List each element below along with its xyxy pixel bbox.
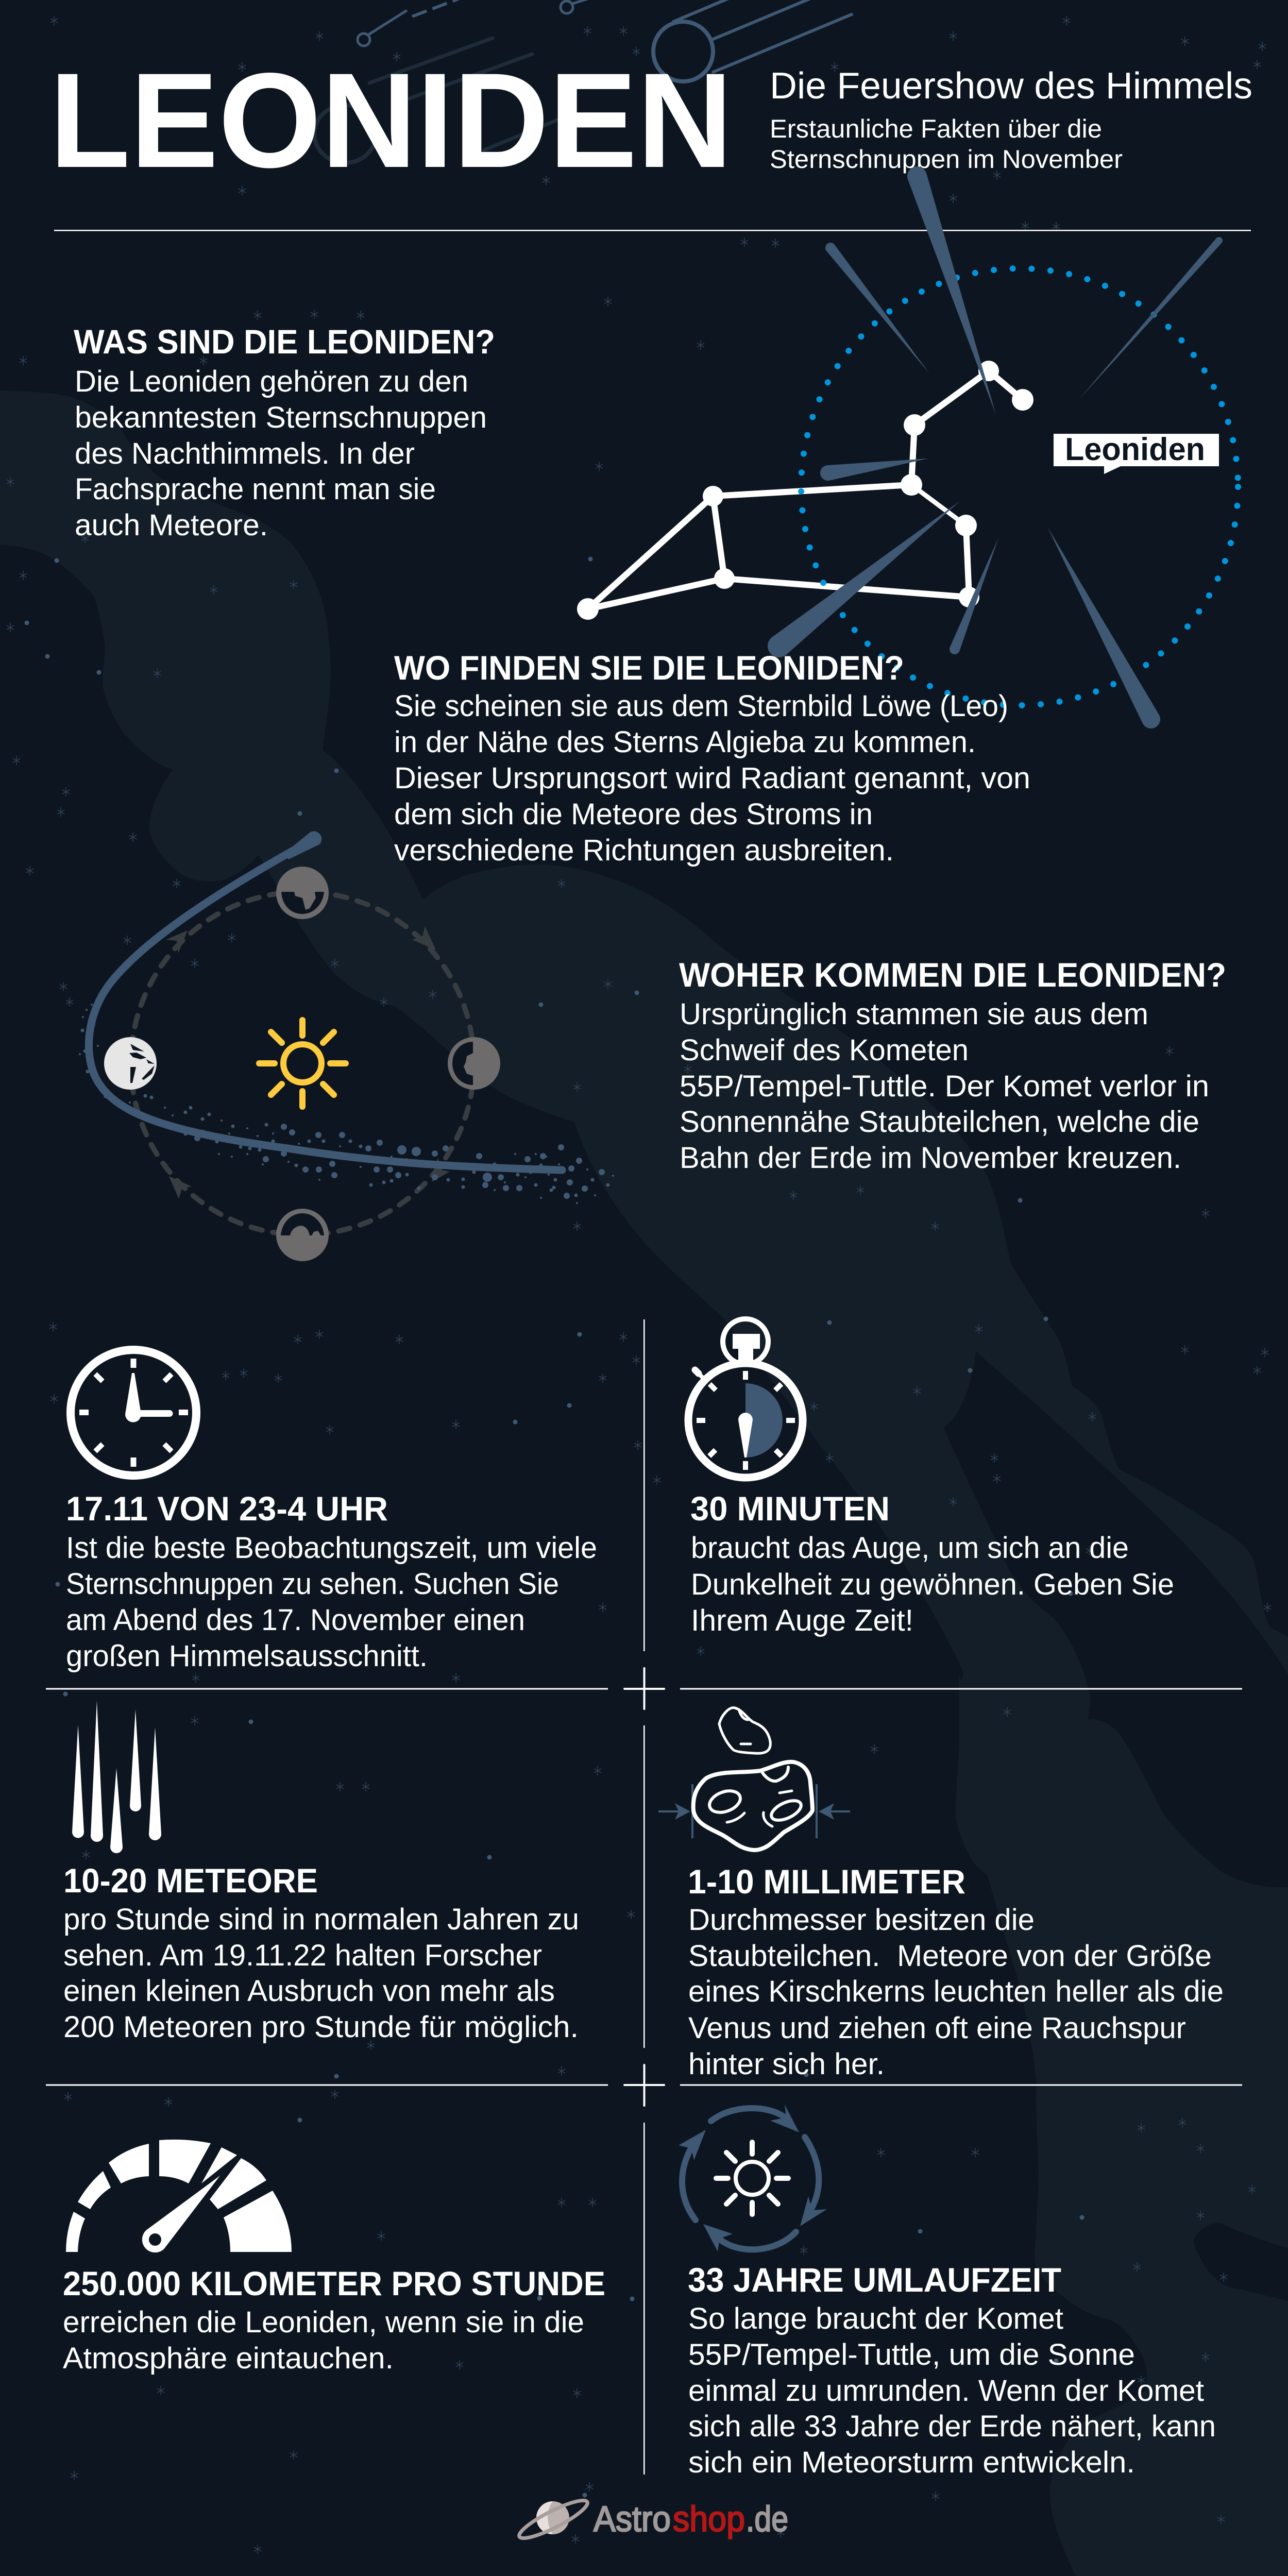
body text: Sie scheinen sie aus dem Sternbild Löwe (Leo) <box>394 689 1008 723</box>
body text: Dunkelheit zu gewöhnen. Geben Sie <box>691 1568 1174 1601</box>
body text: sich alle 33 Jahre der Erde nähert, kann <box>688 2410 1216 2443</box>
body text: Ihrem Auge Zeit! <box>691 1604 913 1637</box>
body text: Sonnennähe Staubteilchen, welche die <box>680 1105 1199 1139</box>
body text: Atmosphäre eintauchen. <box>63 2342 394 2375</box>
body text: großen Himmelsausschnitt. <box>66 1639 428 1673</box>
dotted radiant circle <box>801 268 1238 705</box>
title: LEONIDEN <box>49 45 733 196</box>
body text: Bahn der Erde im November kreuzen. <box>680 1141 1181 1175</box>
meteors <box>763 164 1224 732</box>
chart: Leo constellation with meteors <box>577 164 1238 732</box>
heading: 30 MINUTEN <box>690 1489 890 1528</box>
body text: sehen. Am 19.11.22 halten Forscher <box>63 1939 542 1972</box>
body text: Ist die beste Beobachtungszeit, um viele <box>66 1531 597 1565</box>
body text: Schweif des Kometen <box>680 1033 969 1067</box>
body text: bekanntesten Sternschnuppen <box>75 401 487 434</box>
body text: Die Leoniden gehören zu den <box>75 365 468 398</box>
body text: in der Nähe des Sterns Algieba zu kommen. <box>394 725 976 759</box>
body text: Fachsprache nennt man sie <box>75 472 436 506</box>
body text <box>63 2306 584 2375</box>
text block: Wo finden sie die Leoniden <box>394 649 1030 867</box>
heading: 250.000 KILOMETER PRO STUNDE <box>63 2264 605 2302</box>
text block: Woher kommen die Leoniden <box>679 956 1226 1175</box>
body text: Staubteilchen. Meteore von der Größe <box>688 1939 1212 1973</box>
heading: 1-10 MILLIMETER <box>688 1862 965 1901</box>
body text <box>63 1903 579 2044</box>
icon: clock <box>71 1350 196 1476</box>
earth orbit <box>131 892 474 1235</box>
constellation lines and stars <box>577 361 1033 620</box>
body text: pro Stunde sind in normalen Jahren zu <box>63 1903 579 1936</box>
wordmark: Astro <box>594 2499 671 2539</box>
icon: falling meteors <box>72 1701 161 1853</box>
subtitle: Die Feuershow des Himmels <box>770 65 1252 107</box>
panel: particle size <box>658 1708 1224 2081</box>
body text <box>394 689 1030 867</box>
heading: WO FINDEN SIE DIE LEONIDEN? <box>394 649 904 687</box>
body text: braucht das Auge, um sich an die <box>691 1531 1129 1565</box>
body text <box>75 365 487 542</box>
wordmark: shop <box>673 2499 745 2539</box>
wordmark: .de <box>746 2499 788 2539</box>
earth: right position <box>448 1037 500 1090</box>
sun <box>259 1020 346 1107</box>
body text: Ursprünglich stammen sie aus dem <box>680 997 1148 1031</box>
decorative falling comets <box>314 0 852 163</box>
panel: speed <box>63 2140 605 2375</box>
body text <box>688 1903 1224 2081</box>
body text: Dieser Ursprungsort wird Radiant genannt, von <box>394 761 1030 795</box>
body text: 55P/Tempel-Tuttle, um die Sonne <box>688 2338 1135 2371</box>
panel: meteors per hour <box>63 1701 579 2044</box>
heading: WAS SIND DIE LEONIDEN? <box>74 323 495 361</box>
body text: Sternschnuppen zu sehen. Suchen Sie <box>66 1567 559 1601</box>
body text: dem sich die Meteore des Stroms in <box>394 798 873 831</box>
icon: ringed planet <box>516 2495 591 2544</box>
subtitle <box>770 65 1252 174</box>
comet path <box>89 832 562 1170</box>
dust trail <box>80 1005 613 1203</box>
panel: 30 minutes <box>688 1319 1174 1637</box>
heading: 10-20 METEORE <box>63 1861 318 1900</box>
body text: hinter sich her. <box>688 2047 885 2081</box>
body text <box>688 2302 1216 2479</box>
logo: Astroshop.de <box>516 2495 788 2544</box>
body text: einen kleinen Ausbruch von mehr als <box>63 1974 555 2008</box>
heading: WOHER KOMMEN DIE LEONIDEN? <box>679 956 1226 994</box>
diagram: comet orbit around the sun <box>80 832 613 1261</box>
body text: am Abend des 17. November einen <box>66 1603 525 1637</box>
body text: sich ein Meteorsturm entwickeln. <box>688 2446 1135 2479</box>
heading: 17.11 VON 23-4 UHR <box>66 1489 388 1528</box>
earth: top position <box>276 867 329 919</box>
wordmark <box>594 2499 788 2539</box>
icon: stopwatch <box>688 1319 803 1478</box>
body text: erreichen die Leoniden, wenn sie in die <box>63 2306 584 2339</box>
body text <box>691 1531 1174 1637</box>
body text: einmal zu umrunden. Wenn der Komet <box>688 2374 1204 2408</box>
panel: orbital period <box>679 2105 1216 2479</box>
body text <box>66 1531 597 1673</box>
body text: des Nachthimmels. In der <box>75 437 415 470</box>
body text: eines Kirschkerns leuchten heller als die <box>688 1975 1224 2008</box>
panel: observation time <box>66 1350 597 1673</box>
icon: sun with orbit arrows <box>679 2105 827 2251</box>
icon: speedometer <box>66 2140 292 2252</box>
icon: asteroid with size arrows <box>658 1708 850 1850</box>
body text: 200 Meteoren pro Stunde für möglich. <box>63 2010 579 2044</box>
text block: Was sind die Leoniden <box>74 323 495 542</box>
label: Leoniden: Leoniden <box>1065 432 1205 467</box>
subtitle: Erstaunliche Fakten über die <box>770 114 1102 143</box>
heading: 33 JAHRE UMLAUFZEIT <box>688 2261 1061 2299</box>
body text: 55P/Tempel-Tuttle. Der Komet verlor in <box>680 1070 1209 1103</box>
subtitle: Sternschnuppen im November <box>770 145 1123 174</box>
body text: Venus und ziehen oft eine Rauchspur <box>688 2011 1186 2045</box>
body text: Durchmesser besitzen die <box>688 1903 1035 1937</box>
grid dividers <box>46 1319 1242 2475</box>
earth: left position, highlighted <box>104 1037 157 1090</box>
body text <box>680 997 1209 1175</box>
body text: So lange braucht der Komet <box>688 2302 1063 2335</box>
body text: auch Meteore. <box>75 509 268 542</box>
earth: bottom position <box>276 1209 329 1261</box>
body text: verschiedene Richtungen ausbreiten. <box>394 834 894 867</box>
